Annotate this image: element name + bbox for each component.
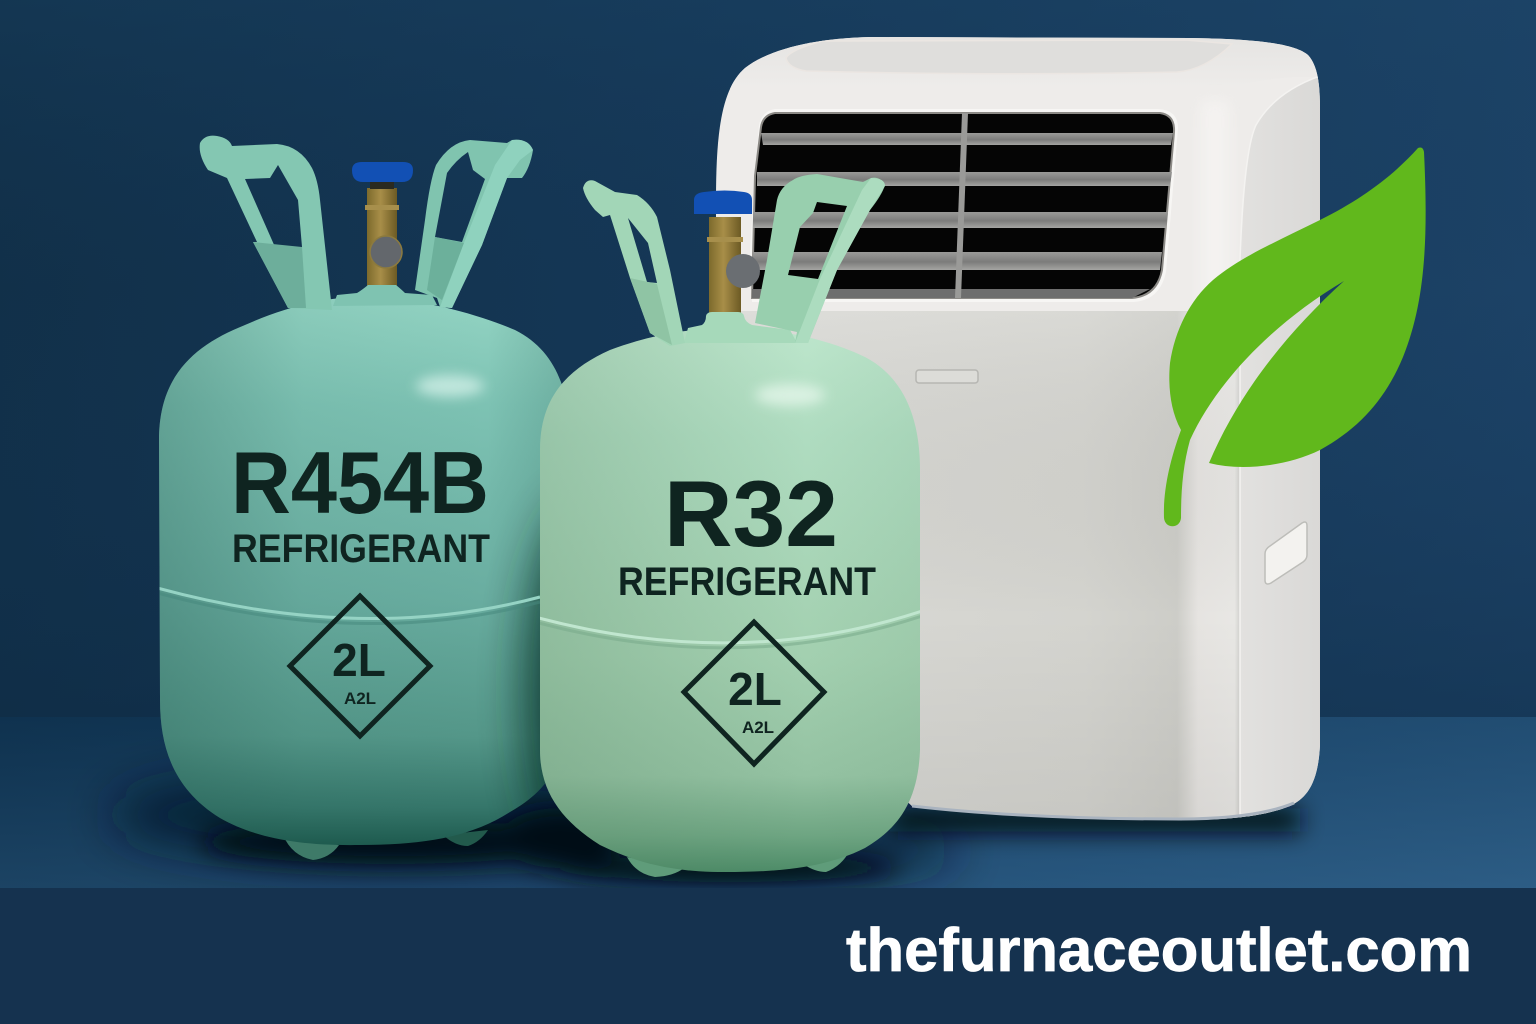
right handle [415, 140, 533, 308]
ac side panel [1239, 76, 1320, 818]
tank label [618, 461, 876, 604]
ac base lip [912, 803, 1294, 819]
tank feet [627, 850, 850, 877]
tank feet [283, 830, 488, 860]
hazard diamond [684, 622, 824, 764]
neck collar [684, 312, 797, 343]
tank body [530, 320, 930, 880]
ac top lid [730, 37, 1318, 89]
tank body [159, 298, 562, 846]
neck collar [333, 285, 437, 306]
broad floor shadow [110, 769, 960, 878]
shadow cast by second tank [494, 495, 546, 810]
tank label [231, 433, 490, 571]
tank label: REFRIGERANT [618, 560, 876, 604]
hazard diamond [290, 596, 430, 736]
footer band [0, 888, 1536, 1024]
valve [694, 190, 760, 315]
band seam [535, 610, 925, 648]
tank label: REFRIGERANT [232, 527, 490, 571]
website address: thefurnaceoutlet.com [846, 916, 1472, 984]
refrigerant tank: R454B [159, 136, 562, 860]
contact shadows [200, 808, 1300, 882]
portable air conditioner [700, 30, 1330, 825]
ac button [916, 370, 978, 383]
specular highlight [755, 384, 825, 406]
background wall [0, 0, 1536, 717]
left handle [583, 180, 685, 346]
leaf icon [1164, 148, 1426, 526]
left handle [200, 136, 332, 310]
valve [352, 162, 413, 286]
floor [0, 717, 1536, 888]
specular highlight [416, 375, 484, 397]
tank label: R32 [664, 461, 838, 566]
hazard diamond: 2L [728, 663, 782, 715]
band seam [150, 586, 540, 624]
ac side handle [1265, 522, 1307, 584]
ac grille [750, 109, 1178, 302]
hazard diamond: A2L [344, 689, 376, 708]
refrigerant tank: R32 [530, 174, 930, 880]
tank label: R454B [231, 433, 489, 532]
hazard diamond: 2L [332, 634, 386, 686]
hazard diamond: A2L [742, 718, 774, 737]
ac lower front panel [716, 311, 1240, 821]
right handle [755, 174, 885, 343]
